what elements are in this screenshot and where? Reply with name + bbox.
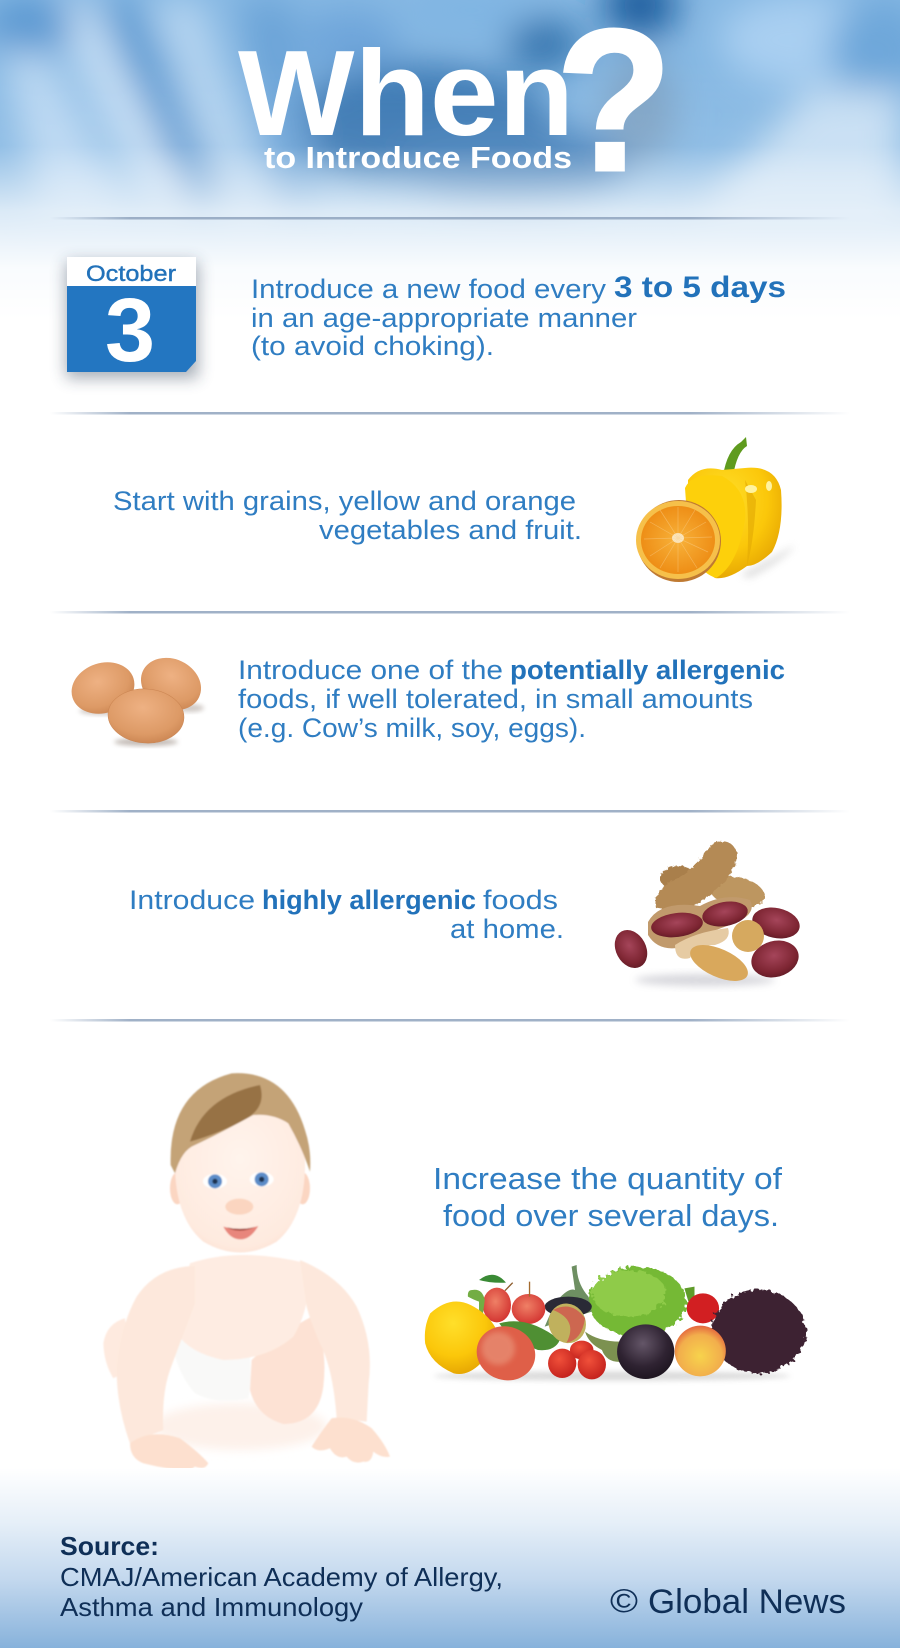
panel: grains, vegetables and fruit	[113, 437, 795, 582]
footer gradient band	[0, 1468, 900, 1648]
illustration: fruit and vegetables	[425, 1265, 806, 1389]
text block: highly allergenic: foods	[483, 885, 558, 915]
source credit	[60, 1531, 503, 1622]
text block: potentially allergenic: (e.g. Cow’s milk, soy, eggs).	[238, 713, 586, 743]
text block: grains: vegetables and fruit.	[319, 515, 582, 545]
source credit: CMAJ/American Academy of Allergy,	[60, 1562, 503, 1592]
knee leg	[250, 1317, 324, 1424]
nose	[225, 1199, 253, 1215]
header background: blurred blue food photo	[0, 0, 900, 320]
text block: potentially allergenic: foods, if well tolerated, in small amounts	[238, 684, 753, 714]
text block: highly allergenic: highly allergenic	[262, 885, 476, 915]
text block: potentially allergenic: potentially allergenic	[510, 655, 785, 685]
text block: potentially allergenic	[238, 655, 785, 743]
text block: increase quantity: Increase the quantity of	[433, 1161, 782, 1196]
icon: yellow pepper and orange	[636, 437, 795, 582]
subtitle: to Introduce Foods	[264, 140, 572, 175]
hand left	[130, 1434, 208, 1471]
icon: calendar	[66, 257, 198, 381]
icon: calendar: 3	[105, 281, 155, 381]
icon: calendar: October	[86, 261, 176, 286]
eyes	[203, 1174, 227, 1189]
panel: potentially allergenic foods	[65, 648, 785, 746]
text block: increase quantity	[433, 1161, 782, 1233]
text block: new food: in an age-appropriate manner	[251, 303, 637, 333]
text block: new food: (to avoid choking).	[251, 331, 494, 361]
text block: increase quantity: food over several days.	[443, 1198, 779, 1233]
source credit: Asthma and Immunology	[60, 1592, 363, 1622]
text block: grains	[113, 486, 582, 545]
right arm	[300, 1260, 370, 1422]
hand right	[312, 1418, 390, 1463]
panel: introduce a new food every 3 to 5 days	[66, 257, 786, 381]
text block: new food	[251, 271, 786, 361]
text block: highly allergenic: at home.	[450, 914, 564, 944]
text block: potentially allergenic: Introduce one of the	[238, 655, 503, 685]
text block: grains: Start with grains, yellow and orange	[113, 486, 576, 516]
copyright: Global News: ©	[610, 1582, 638, 1619]
head	[170, 1073, 310, 1252]
icon: eggs	[65, 648, 210, 746]
mouth	[223, 1226, 258, 1239]
icon: peanuts	[608, 841, 803, 988]
hair	[171, 1073, 310, 1173]
text block: highly allergenic	[129, 885, 564, 944]
left arm	[117, 1266, 195, 1443]
panel: highly allergenic foods	[129, 841, 803, 988]
panel: increase the quantity	[425, 1161, 806, 1389]
torso	[177, 1255, 308, 1360]
title	[238, 0, 672, 213]
title word: When: When	[238, 25, 574, 161]
diaper	[173, 1333, 251, 1401]
far foot	[103, 1318, 130, 1378]
text block: new food: 3 to 5 days	[614, 271, 786, 304]
copyright: Global News: Global News	[648, 1583, 846, 1621]
illustration: crawling baby	[103, 1073, 390, 1471]
source credit: Source:	[60, 1531, 159, 1561]
text block: highly allergenic: Introduce	[129, 885, 255, 915]
text block: new food: Introduce a new food every	[251, 274, 607, 304]
